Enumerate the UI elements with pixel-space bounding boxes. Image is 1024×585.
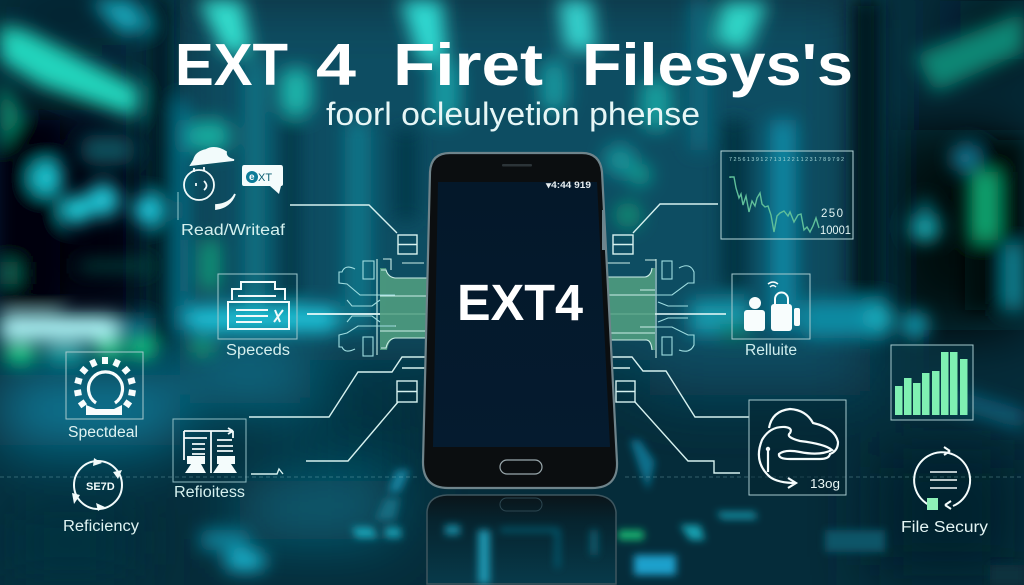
icon: printer bbox=[228, 282, 289, 329]
icon: file cycle bbox=[914, 447, 970, 510]
icon: cloud and bulb bbox=[178, 148, 235, 220]
cloud panel bbox=[749, 400, 846, 495]
reficiency group bbox=[63, 458, 139, 535]
icon: ext speech bubble: e bbox=[249, 172, 255, 183]
title: Filesys's bbox=[582, 32, 853, 98]
left connector lines bbox=[249, 205, 428, 474]
left circuit block bbox=[339, 259, 428, 357]
title: 4 bbox=[316, 32, 356, 98]
file security group bbox=[901, 447, 988, 536]
icon: gauge bbox=[74, 357, 136, 415]
chart axis digits: 7 2 5 6 1 3 9 1 2 7 1 3 1 2 2 1 1 2 3 1 7 8 9 7 9 2 bbox=[729, 157, 844, 163]
icon: ext speech bubble: XT bbox=[258, 172, 272, 184]
chart value: 250: 250 bbox=[821, 208, 843, 220]
title: Firet bbox=[393, 32, 543, 98]
line chart panel bbox=[721, 151, 853, 239]
label: file security: File Secury bbox=[901, 519, 988, 536]
title bbox=[175, 32, 853, 98]
relluite panel bbox=[732, 274, 810, 359]
side button bbox=[602, 210, 605, 250]
label: relluite: Relluite bbox=[745, 342, 797, 359]
chart value: 10001: 10001 bbox=[820, 225, 851, 237]
icon: se7d cycle: SE7D bbox=[86, 481, 115, 493]
label: speeds: Speceds bbox=[226, 342, 290, 359]
label: refioitess: Refioitess bbox=[174, 484, 245, 501]
cloud value: 13og bbox=[810, 476, 840, 491]
speeds panel bbox=[218, 274, 297, 359]
speaker bbox=[502, 164, 532, 166]
label: spectdeal: Spectdeal bbox=[68, 424, 138, 441]
line chart bbox=[730, 177, 819, 232]
read/write icon group bbox=[178, 148, 286, 239]
right connector lines bbox=[608, 204, 749, 473]
phone screen bbox=[433, 182, 610, 447]
info dot bbox=[766, 447, 770, 451]
status bar: ▾4:44 919 bbox=[545, 180, 591, 190]
bars bbox=[895, 352, 968, 415]
phone bbox=[423, 153, 617, 488]
icon: ext speech bubble bbox=[242, 165, 283, 194]
spectdeal panel bbox=[66, 352, 143, 441]
phone screen label: EXT4 bbox=[457, 274, 584, 331]
icon: cloud with arrow bbox=[759, 409, 838, 488]
bar chart panel bbox=[891, 345, 973, 420]
right circuit block bbox=[607, 259, 694, 358]
icon: servers and files bbox=[184, 428, 237, 473]
phone body bbox=[423, 153, 617, 488]
home button bbox=[500, 460, 542, 474]
icon: person and lock bbox=[744, 282, 800, 331]
phone reflection bbox=[427, 495, 616, 584]
subtitle: foorl ocleulyetion phense bbox=[326, 96, 700, 132]
label: read/write: Read/Writeaf bbox=[181, 222, 286, 239]
refioitess panel bbox=[173, 419, 246, 501]
title: EXT bbox=[175, 32, 288, 98]
label: reficiency: Reficiency bbox=[63, 518, 139, 535]
